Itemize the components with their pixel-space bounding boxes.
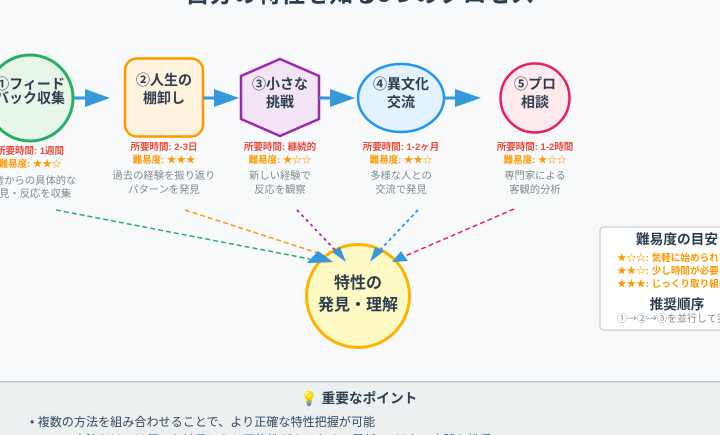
icon: blue ellipse bbox=[358, 64, 444, 132]
legend two stars: ★★☆: 少し時間が必要 bbox=[617, 265, 719, 277]
arrow 4 to 5 bbox=[445, 89, 481, 107]
step 2: life inventory bbox=[113, 58, 215, 196]
arrow 1 to 2 bbox=[74, 89, 110, 107]
step 5 description: 専門家による bbox=[504, 171, 566, 182]
step 3 label: ③小さな bbox=[252, 76, 308, 92]
key points heading: 💡 重要なポイント bbox=[301, 390, 417, 406]
step 4 label: ④異文化 bbox=[373, 76, 429, 92]
dashed arrow: orange bbox=[185, 210, 333, 263]
dashed arrow: green bbox=[56, 210, 333, 263]
step 4 label: 交流 bbox=[387, 94, 415, 110]
center circle: discovery of traits: 発見・理解 bbox=[318, 296, 398, 314]
icon: pink circle bbox=[500, 64, 570, 132]
dashed arrow: purple bbox=[297, 210, 346, 262]
dashed arrow: blue bbox=[370, 210, 418, 262]
step 4 difficulty: 難易度: ★★☆ bbox=[370, 154, 433, 166]
step 5 time: 所要時間: 1-2時間 bbox=[497, 141, 573, 153]
step 4: cross-cultural exchange bbox=[358, 64, 444, 196]
center circle: discovery of traits: 特性の bbox=[334, 275, 382, 292]
step 3 description: 反応を観察 bbox=[254, 183, 306, 196]
step 3 difficulty: 難易度: ★☆☆ bbox=[249, 154, 312, 166]
panel: key points bbox=[0, 381, 720, 435]
step 2 time: 所要時間: 2-3日 bbox=[130, 141, 198, 153]
step 3: small challenge bbox=[241, 59, 319, 196]
step 2 difficulty: 難易度: ★★★ bbox=[133, 154, 196, 166]
panel: difficulty legend bbox=[600, 227, 720, 330]
step 5 description: 客観的分析 bbox=[509, 183, 561, 196]
step 2 label: ②人生の bbox=[136, 72, 192, 88]
step 2 label: 棚卸し bbox=[143, 90, 185, 106]
step 2 description: パターンを発見 bbox=[128, 183, 200, 196]
step 5: professional consultation bbox=[497, 64, 573, 196]
dashed arrow: pink bbox=[392, 209, 514, 262]
arrow 2 to 3 bbox=[203, 89, 239, 107]
step 4 time: 所要時間: 1-2ヶ月 bbox=[363, 141, 439, 153]
icon: purple hexagon bbox=[241, 59, 319, 136]
step 1 difficulty: 難易度: ★★☆ bbox=[0, 158, 62, 170]
icon: green circle bbox=[0, 55, 73, 141]
icon: orange rounded square bbox=[125, 58, 203, 136]
step 3 description: 新しい経験で bbox=[249, 171, 311, 182]
recommended order heading: 推奨順序 bbox=[650, 296, 705, 312]
center circle: discovery of traits bbox=[306, 244, 410, 348]
step 5 difficulty: 難易度: ★☆☆ bbox=[504, 154, 567, 166]
step 4 description: 交流で発見 bbox=[375, 183, 427, 196]
legend heading: 難易度の目安 bbox=[636, 231, 718, 247]
step 5 label: 相談 bbox=[521, 94, 549, 110]
key point 1: • 複数の方法を組み合わせることで、より正確な特性把握が可能 bbox=[30, 414, 375, 429]
arrow 3 to 4 bbox=[319, 89, 355, 107]
step 2 description: 過去の経験を振り返り bbox=[113, 171, 215, 182]
step 3 time: 所要時間: 継続的 bbox=[244, 141, 316, 153]
step 3 label: 挑戦 bbox=[266, 94, 294, 110]
step 1: feedback bbox=[0, 55, 76, 200]
step 4 description: 多様な人との bbox=[370, 171, 432, 182]
step 5 label: ⑤プロ bbox=[514, 76, 556, 92]
